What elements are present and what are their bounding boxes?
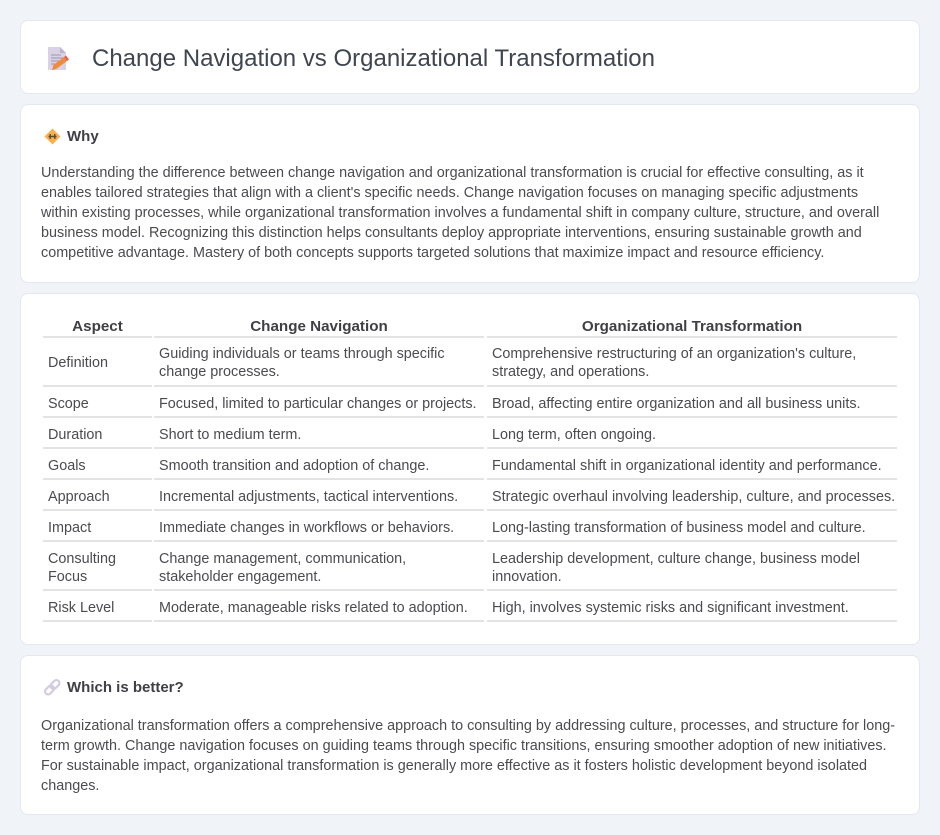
table row: consulting focus: Change management, communication, [159,551,406,567]
table row: impact: Long-lasting transformation of business model and culture. [492,520,866,536]
table row: definition: Comprehensive restructuring of an organization's culture, [492,346,856,362]
table header row: Organizational Transformation [582,318,802,335]
table row: definition: strategy, and operations. [492,364,649,380]
table row: approach: Approach [48,489,110,505]
text block: which is better paragraph [41,718,895,794]
panel: header [20,20,920,94]
title: Change Navigation vs Organizational Transformation [92,45,655,72]
table row: definition: Definition [48,355,108,371]
table row: scope: Scope [48,396,89,412]
table header row: Aspect [72,318,123,335]
table row: goals: Fundamental shift in organizational identity and performance. [492,458,882,474]
table row: definition: Guiding individuals or teams through specific [159,346,445,362]
panel: which is better [20,655,920,815]
icon: warning diamond [44,128,60,144]
table row: consulting focus: stakeholder engagement. [159,569,321,585]
table row: impact: Impact [48,520,91,536]
panel: comparison table [20,293,920,645]
text block: which is better paragraph: Organizational transformation offers a comprehensive approach to consulting by addressing culture, processes, and structure for long- [41,718,895,734]
heading: which is better: Which is better? [67,679,184,696]
table header row: Change Navigation [250,318,388,335]
table row: approach: Strategic overhaul involving leadership, culture, and processes. [492,489,895,505]
table row: risk level: Moderate, manageable risks related to adoption. [159,600,468,616]
table row: risk level: Risk Level [48,600,114,616]
panel: why [20,104,920,283]
icon: memo with pencil [48,47,69,70]
table row: goals: Goals [48,458,86,474]
table header row [72,318,802,335]
table row: duration: Duration [48,427,102,443]
text block: why paragraph: business model. Recognizing this distinction helps consultants deploy appropriate interventions, ensuring sustainable growth and [41,225,862,241]
icon: chain link [44,679,60,696]
text block: why paragraph [41,165,879,261]
heading: why: Why [67,128,99,145]
table row: impact: Immediate changes in workflows or behaviors. [159,520,454,536]
table row: duration: Short to medium term. [159,427,301,443]
table row: scope: Broad, affecting entire organization and all business units. [492,396,861,412]
text block: which is better paragraph: changes. [41,778,99,794]
table row: approach [48,489,895,505]
table row: duration: Long term, often ongoing. [492,427,656,443]
text block: why paragraph: enables tailored strategies that align with a client's specific needs. Change navigation focuses on managing specific adjustments [41,185,858,201]
table row: goals [48,458,882,474]
table row: risk level [48,600,849,616]
table row: duration [48,427,656,443]
table row: approach: Incremental adjustments, tactical interventions. [159,489,458,505]
table row: scope: Focused, limited to particular changes or projects. [159,396,477,412]
table row: consulting focus: innovation. [492,569,562,585]
text block: which is better paragraph: term growth. Change navigation focuses on guiding teams through specific transitions, ensuring smoother adoption of new initiatives. [41,738,887,754]
table row: impact [48,520,866,536]
table row: risk level: High, involves systemic risks and significant investment. [492,600,849,616]
text block: why paragraph: Understanding the difference between change navigation and organizational transformation is crucial for effective consulting, as it [41,165,864,181]
text block: why paragraph: competitive advantage. Mastery of both concepts supports targeted solutions that maximize impact and resource efficiency. [41,245,824,261]
table row: consulting focus [48,551,860,585]
table row: goals: Smooth transition and adoption of change. [159,458,429,474]
table row: consulting focus: Consulting [48,551,116,567]
text block: which is better paragraph: For sustainable impact, organizational transformation is generally more effective as it fosters holistic development beyond isolated [41,758,867,774]
table row: consulting focus: Leadership development, culture change, business model [492,551,860,567]
table row: scope [48,396,861,412]
table row: definition [48,346,856,380]
text block: why paragraph: within existing processes, while organizational transformation involves a fundamental shift in company culture, structure, and overall [41,205,879,221]
table row: consulting focus: Focus [48,569,87,585]
table row: definition: change processes. [159,364,280,380]
